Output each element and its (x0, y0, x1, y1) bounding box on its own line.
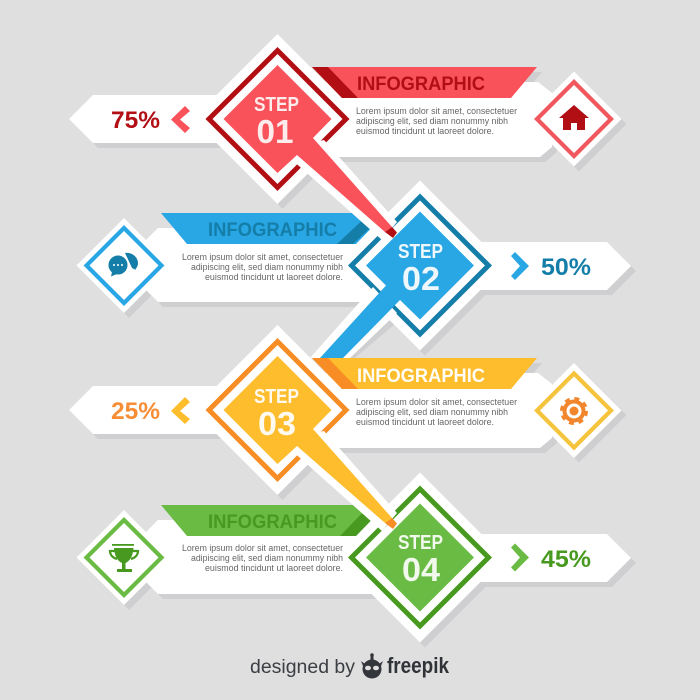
step 2 ribbon: INFOGRAPHIC (208, 220, 337, 241)
step 3 description: adipiscing elit, sed diam nonummy nibh (356, 406, 508, 417)
step 4 description: Lorem ipsum dolor sit amet, consectetuer (182, 542, 343, 553)
step 1 label (254, 94, 299, 150)
step 3 diamond with tail (224, 356, 392, 523)
step 2 diamond with tail (320, 212, 474, 358)
step 3 description (356, 396, 517, 427)
step 2 label: 02 (402, 260, 440, 297)
step 4 ribbon: INFOGRAPHIC (208, 512, 337, 533)
step 2 description: Lorem ipsum dolor sit amet, consectetuer (182, 251, 343, 262)
step 2 text panel (146, 228, 395, 302)
step 2 percent: 50% (541, 254, 591, 281)
step 1 diamond with tail (224, 65, 392, 232)
step 3 connector white outline (280, 431, 397, 531)
step 3 ribbon (312, 358, 537, 389)
step 1 ribbon: INFOGRAPHIC (357, 74, 485, 95)
step 3 text panel (300, 373, 552, 448)
step 3 white diamond (192, 325, 362, 495)
step 4 ring (352, 489, 488, 626)
step 2 description (182, 251, 343, 282)
step 4 description (182, 542, 343, 573)
icon: speech bubbles (76, 218, 172, 313)
step 3 chevron (171, 397, 190, 424)
panel: step 3 (69, 325, 622, 531)
step 3 description: Lorem ipsum dolor sit amet, consectetuer (356, 396, 517, 407)
step 2 ring (352, 197, 488, 334)
step 3 label (254, 386, 299, 442)
step 1 label: 01 (256, 113, 294, 150)
step 3 percent arrow bar (69, 386, 240, 434)
step 1 percent arrow bar (69, 95, 240, 143)
step 4 chevron (511, 544, 529, 572)
step 3 percent: 25% (111, 398, 160, 425)
step 2 connector outline over ring (310, 287, 397, 358)
step 3 label: STEP (254, 386, 299, 408)
step 2 description: euismod tincidunt ut laoreet dolore. (205, 271, 343, 282)
icon: gear (526, 363, 622, 458)
step 4 description: adipiscing elit, sed diam nonummy nibh (191, 552, 343, 563)
step 4 label (398, 532, 443, 588)
step 4 ribbon (161, 505, 386, 536)
panel: step 1 (69, 34, 622, 240)
step 1 label: STEP (254, 94, 299, 116)
step 1 white diamond (192, 34, 362, 204)
step 1 ring (209, 50, 346, 188)
step 1 connector white outline (280, 140, 397, 240)
panel: step 4 (76, 472, 631, 642)
step 3 ribbon: INFOGRAPHIC (357, 366, 485, 387)
step 4 text panel (146, 520, 395, 594)
step 1 description: adipiscing elit, sed diam nonummy nibh (356, 115, 508, 126)
step 4 diamond (366, 504, 474, 612)
step 1 connector end (385, 227, 397, 238)
step 1 chevron (171, 106, 190, 133)
step 3 label: 03 (258, 405, 296, 442)
step 2 white diamond (335, 180, 505, 350)
step 1 ribbon (312, 67, 537, 98)
step 2 label: STEP (398, 241, 443, 263)
step 2 description: adipiscing elit, sed diam nonummy nibh (191, 261, 343, 272)
step 2 chevron (511, 252, 529, 280)
step 4 label: STEP (398, 532, 443, 554)
step 1 description (356, 105, 517, 136)
step 4 label: 04 (402, 551, 441, 588)
step 1 description: Lorem ipsum dolor sit amet, consectetuer (356, 105, 517, 116)
step 2 percent arrow bar (460, 242, 631, 290)
step 3 ring (209, 342, 346, 478)
step 3 description: euismod tincidunt ut laoreet dolore. (356, 416, 494, 427)
step 4 percent arrow bar (460, 534, 631, 582)
step 4 percent: 45% (541, 546, 591, 573)
step 2 label (398, 241, 443, 297)
icon: freepik mascot (361, 653, 383, 678)
step 4 description: euismod tincidunt ut laoreet dolore. (205, 562, 343, 573)
step 3 connector end (385, 518, 397, 529)
step 4 white diamond (335, 472, 505, 642)
step 2 ribbon (161, 213, 386, 244)
panel: step 2 (76, 180, 631, 358)
icon: house (526, 72, 622, 166)
step 1 text panel (300, 82, 552, 157)
icon: trophy (76, 510, 172, 605)
footer: credit: freepik (387, 653, 450, 678)
footer: credit: designed by (250, 656, 355, 678)
step 1 percent: 75% (111, 107, 160, 134)
step 1 description: euismod tincidunt ut laoreet dolore. (356, 125, 494, 136)
footer: credit (250, 653, 450, 678)
